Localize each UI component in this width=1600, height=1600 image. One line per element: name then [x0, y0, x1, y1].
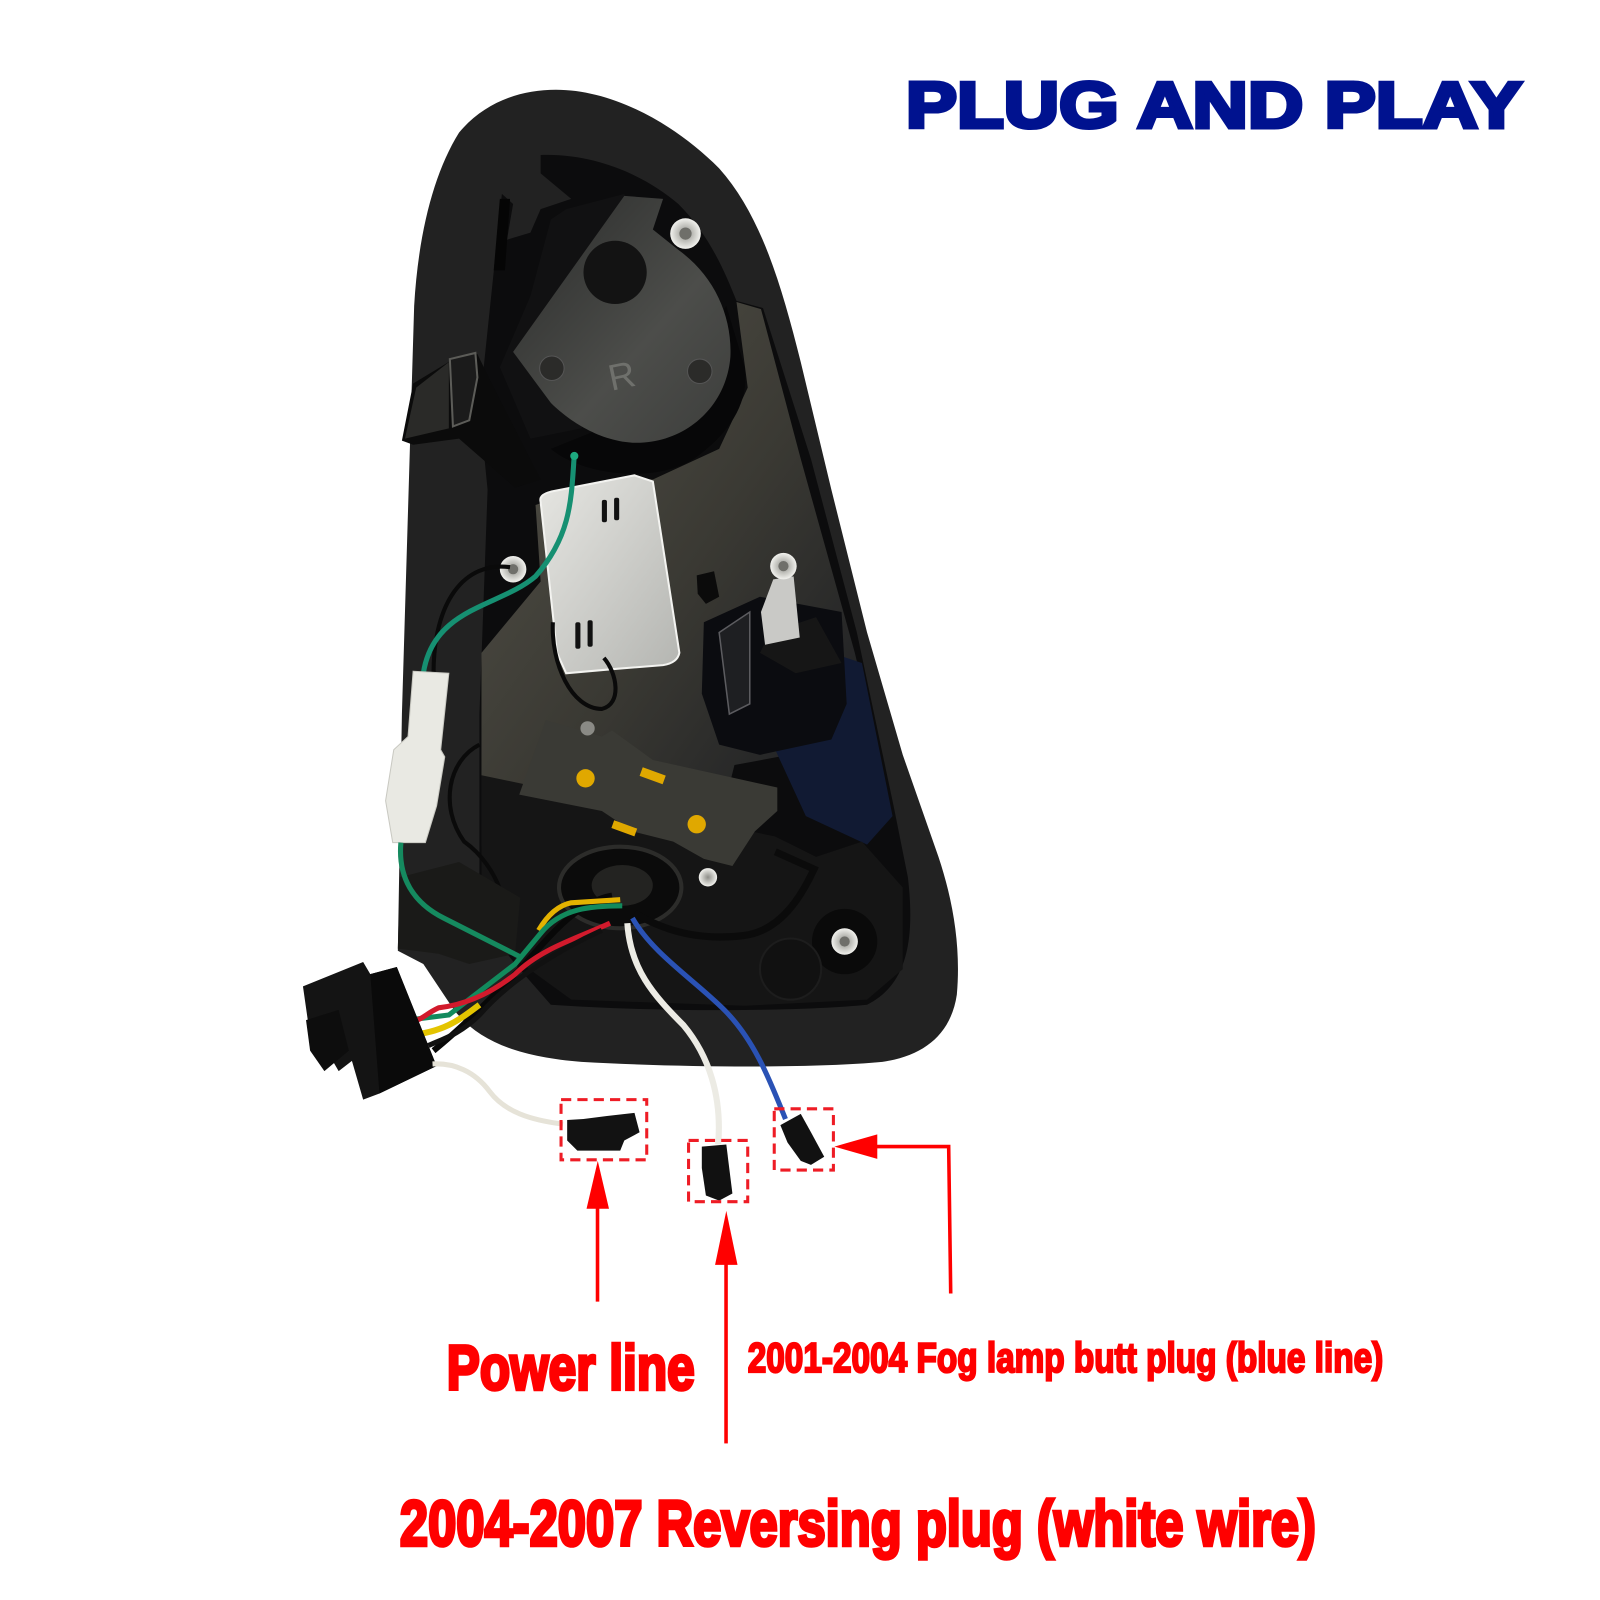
fog blue wire [632, 918, 785, 1119]
lens housing [500, 194, 638, 439]
arrow: reversing plug [715, 1211, 738, 1443]
lower housing [481, 775, 903, 1006]
inner black frame [479, 155, 910, 1010]
fog plug [780, 1114, 824, 1165]
reversing white wire [627, 923, 719, 1145]
right screw [770, 553, 797, 579]
lens dimples [540, 356, 712, 384]
power white wire [433, 1064, 563, 1124]
gray housing plate [481, 302, 879, 867]
small clip post [697, 571, 719, 604]
lens center hole [583, 241, 647, 304]
power line plug [567, 1113, 640, 1151]
socket plate [519, 720, 777, 886]
vent slots [575, 498, 619, 649]
wiring harness [408, 896, 622, 1051]
big harness connector [303, 962, 437, 1100]
socket side bracket [398, 862, 520, 964]
left clip [494, 199, 510, 270]
fog plug callout box [774, 1109, 833, 1170]
reversing plug callout box [689, 1140, 748, 1202]
white inline connector [386, 671, 449, 843]
lens disc [513, 196, 731, 443]
side bracket [402, 353, 541, 488]
green wire [423, 454, 574, 673]
label: reversing plug: 2004-2007 Reversing plug (white wire) [400, 1487, 1316, 1559]
arrow: power line [587, 1161, 609, 1302]
navy reflective strip [775, 653, 893, 845]
title: PLUG AND PLAY [906, 69, 1522, 142]
black thick cable [634, 852, 814, 937]
arrow: fog plug [834, 1134, 951, 1293]
module screw [500, 556, 526, 582]
green wire to harness [401, 843, 520, 957]
tail lamp photo illustration [303, 90, 958, 1201]
black control wire [434, 567, 616, 944]
power line callout box [561, 1100, 647, 1160]
embossed letter R: R [605, 353, 639, 399]
label: fog lamp plug: 2001-2004 Fog lamp butt plug (blue line) [748, 1334, 1383, 1381]
top screw [670, 218, 701, 249]
bulb contacts [576, 767, 706, 836]
crescent under lens [551, 306, 745, 474]
mount circle [760, 938, 821, 1000]
foam gasket outline [398, 90, 958, 1066]
label: power line: Power line [447, 1333, 695, 1403]
threaded stud pedestal [702, 576, 847, 755]
white control module [540, 475, 679, 673]
lower lamp screw [812, 909, 877, 974]
rubber grommet [559, 847, 681, 928]
wire green tip [570, 452, 578, 460]
plate screw [699, 868, 717, 886]
reversing plug [702, 1145, 732, 1201]
